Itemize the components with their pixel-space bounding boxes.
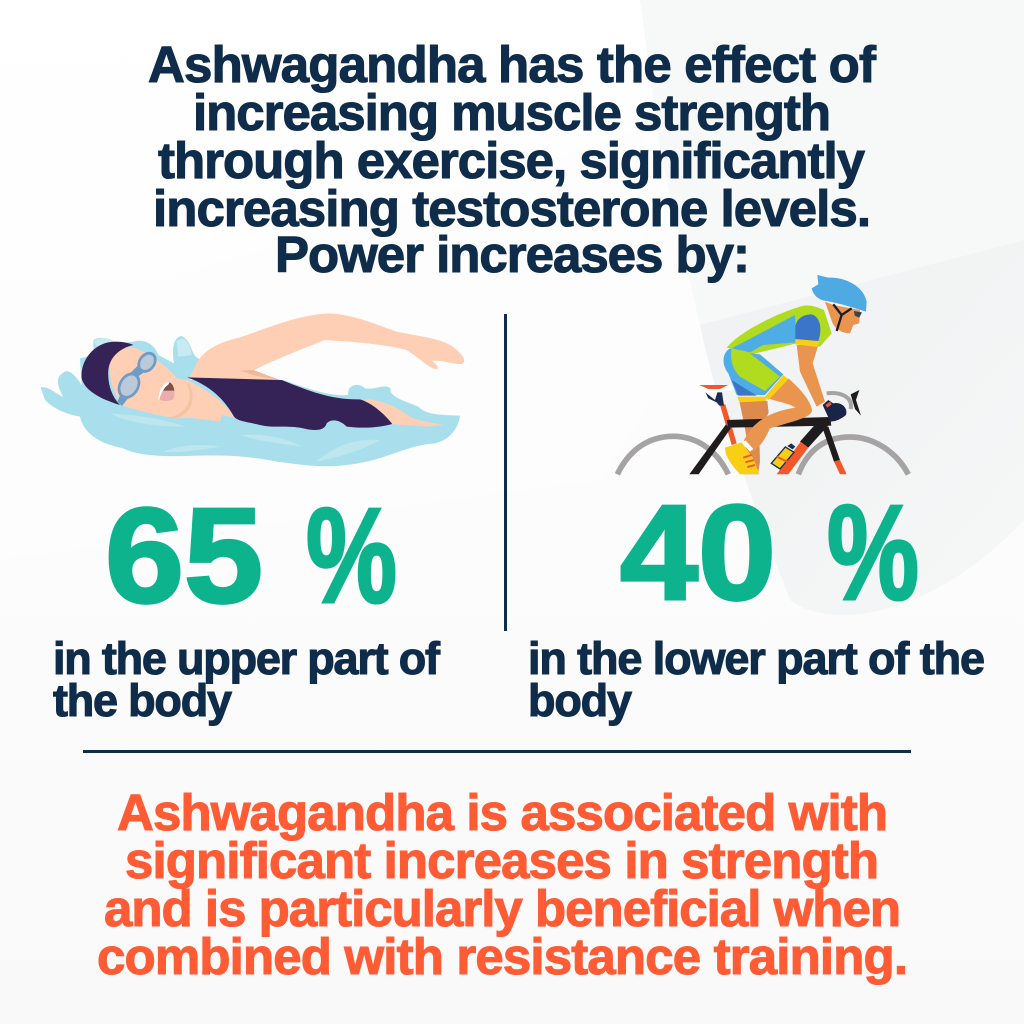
conclusion text: combined with resistance training. <box>97 928 908 985</box>
frame <box>689 417 840 474</box>
label: upper body: the body <box>53 675 232 726</box>
near leg <box>743 378 812 451</box>
stat: 40 %: % <box>827 477 919 628</box>
title <box>148 36 877 283</box>
label: upper body <box>53 633 441 726</box>
saddle <box>697 386 739 391</box>
divider <box>504 314 507 631</box>
title: through exercise, significantly <box>158 132 866 189</box>
title: Ashwagandha has the effect of <box>148 36 877 93</box>
stat: 65 %: % <box>306 480 397 631</box>
stat: 65 % <box>105 480 397 631</box>
conclusion text: significant increases in strength <box>125 832 879 889</box>
shorts <box>724 348 783 395</box>
handlebar <box>827 393 851 409</box>
glove <box>823 400 846 421</box>
stat: 65 %: 65 <box>105 480 263 631</box>
title: increasing muscle strength <box>193 84 831 141</box>
arm <box>797 345 825 407</box>
stat: 40 % <box>620 477 919 628</box>
head <box>825 302 860 333</box>
bottle <box>771 447 794 469</box>
icon: cyclist <box>617 275 908 474</box>
label: lower body: body <box>528 675 632 726</box>
conclusion text: and is particularly beneficial when <box>104 880 901 937</box>
title: increasing testosterone levels. <box>153 180 871 237</box>
strap <box>833 304 852 331</box>
label: lower body <box>528 633 985 726</box>
far leg <box>739 401 769 474</box>
seat tube <box>720 404 737 445</box>
wheels <box>617 436 908 474</box>
horizontal rule <box>83 750 911 753</box>
label: upper body: in the upper part of <box>53 633 441 684</box>
title: Power increases by: <box>275 226 750 283</box>
label: lower body: in the lower part of the <box>528 633 985 684</box>
stat: 40 %: 40 <box>620 477 776 628</box>
conclusion text <box>97 784 908 985</box>
helmet <box>812 275 867 312</box>
icon: swimmer <box>41 313 464 466</box>
shoe <box>725 442 759 474</box>
jersey <box>727 306 832 354</box>
conclusion text: Ashwagandha is associated with <box>117 784 888 841</box>
